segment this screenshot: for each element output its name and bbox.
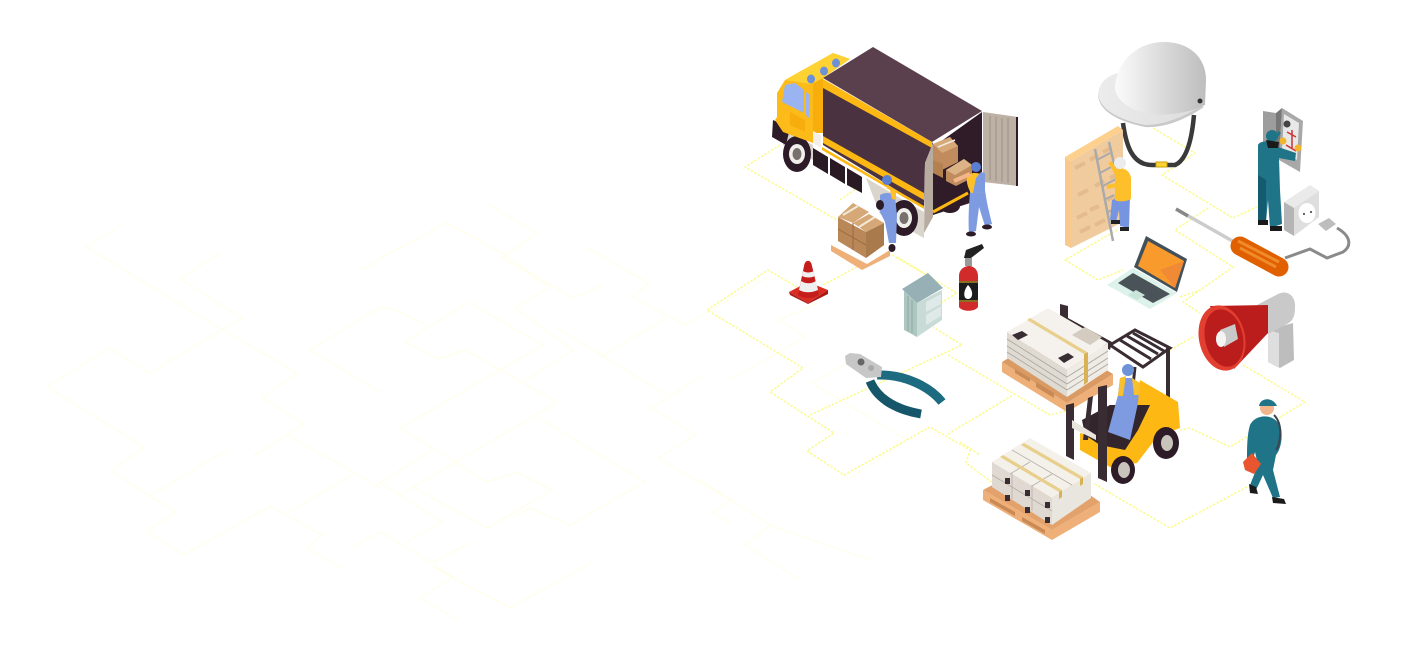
ladder worker xyxy=(1107,157,1131,231)
forklift body xyxy=(1080,380,1180,467)
faint isometric circuit lines: left xyxy=(47,204,907,620)
power socket and cable xyxy=(1284,185,1349,258)
ladder xyxy=(1095,142,1120,241)
walking technician with toolbox xyxy=(1243,399,1286,504)
truck wheels and skirt xyxy=(783,128,960,238)
loaded pallet on forklift xyxy=(1002,308,1113,412)
dashed isometric circuit lines: around illustrations xyxy=(707,128,1305,528)
forklift carriage behind load xyxy=(1060,304,1112,350)
forklift mast xyxy=(1066,385,1107,482)
truck cab xyxy=(772,53,850,148)
forklift overhead guard xyxy=(1110,330,1170,443)
worker unloading truck xyxy=(954,162,992,236)
laptop xyxy=(1107,236,1187,309)
screwdriver xyxy=(1176,209,1279,267)
forklift wheels xyxy=(1111,427,1179,484)
hard hat xyxy=(1098,42,1206,167)
electrician at panel xyxy=(1258,108,1303,231)
megaphone xyxy=(1193,292,1295,375)
truck cargo box xyxy=(822,47,1018,233)
forklift xyxy=(1066,330,1180,484)
brick wall with ladder and worker xyxy=(1065,126,1131,248)
traffic cone xyxy=(789,261,828,304)
pallet of cartons on ground xyxy=(983,438,1100,540)
cargo boxes in truck xyxy=(933,137,972,186)
forklift driver xyxy=(1108,364,1140,440)
truck xyxy=(772,47,1018,238)
fire extinguisher xyxy=(959,244,984,311)
pallet of boxes with worker xyxy=(831,175,897,270)
utility cabinet xyxy=(902,273,943,337)
pliers xyxy=(845,353,942,414)
